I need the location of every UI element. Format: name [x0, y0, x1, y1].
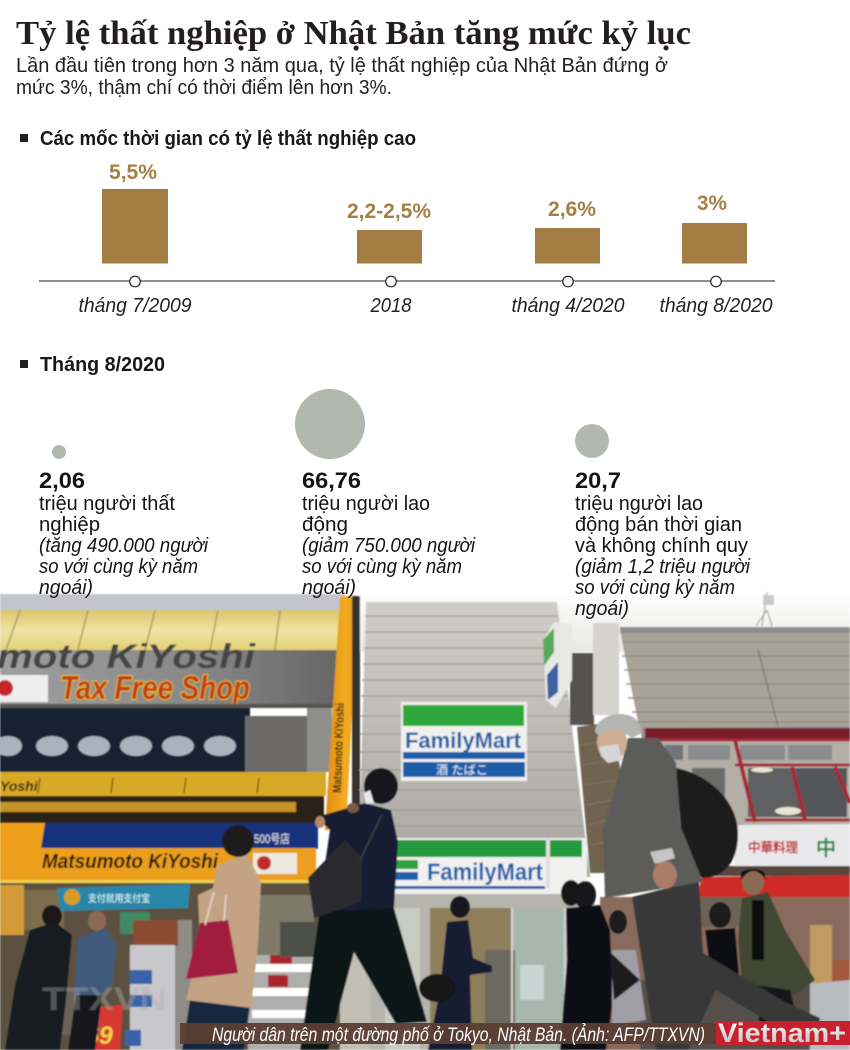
center building: grey siding — [358, 602, 590, 877]
left building: Matsumoto KiYoshi store front: Yoshi — [0, 778, 39, 794]
dark gap and light column between buildings — [570, 623, 624, 873]
stat column: unemployed: nghiệp — [39, 514, 100, 536]
FamilyMart store entrance — [370, 894, 595, 1050]
timeline axis — [39, 276, 775, 317]
timeline axis: tháng 8/2020 — [660, 294, 773, 317]
stat column: unemployed: (tăng 490.000 người — [39, 535, 209, 557]
stat column: labour force: ngoái) — [302, 577, 356, 599]
bar chart: unemployment milestones — [102, 161, 747, 264]
FamilyMart lower sign — [390, 838, 587, 894]
bar: 8/2020 — [682, 192, 747, 264]
intro text: mức 3%, thậm chí có thời điểm lên hơn 3%. — [16, 76, 392, 99]
restaurant sign — [690, 824, 850, 876]
orange pillar with vertical sign — [325, 596, 360, 836]
title: Tỷ lệ thất nghiệp ở Nhật Bản tăng mức kỷ lục — [16, 15, 691, 52]
left building: Matsumoto KiYoshi store front: moto KiYoshi — [0, 638, 257, 676]
heading: August 2020: Tháng 8/2020 — [40, 354, 165, 376]
stat column: part-time workers — [575, 424, 751, 620]
FamilyMart upper sign — [401, 702, 527, 781]
stat column: labour force: so với cùng kỳ năm — [302, 556, 462, 578]
stat column: part-time workers: và không chính quy — [575, 535, 748, 557]
stat column: unemployed: 2,06 — [39, 468, 85, 493]
photo: Tokyo street scene — [0, 592, 850, 1050]
stat column: part-time workers: so với cùng kỳ năm — [575, 577, 735, 599]
FamilyMart upper sign: FamilyMart — [405, 728, 522, 753]
man in dark suit with shoulder bag — [300, 768, 427, 1050]
stat column: labour force: (giảm 750.000 người — [302, 535, 476, 557]
timeline axis: tháng 4/2020 — [512, 294, 625, 317]
woman and man in green coat at right — [705, 869, 815, 1030]
timeline axis: tháng 7/2009 — [78, 294, 192, 317]
small man in FamilyMart doorway — [419, 896, 492, 1050]
photo sky — [358, 592, 850, 652]
intro text: Lần đầu tiên trong hơn 3 năm qua, tỷ lệ thất nghiệp của Nhật Bản đứng ở — [16, 54, 668, 77]
left building: Matsumoto KiYoshi store front: Matsumoto KiYoshi — [42, 851, 218, 873]
timeline axis: 2018 — [370, 294, 412, 317]
stat column: part-time workers: động bán thời gian — [575, 514, 742, 536]
bar: 7/2009 — [102, 161, 168, 264]
left building: Matsumoto KiYoshi store front: 支付就用支付宝 — [88, 892, 150, 905]
stat column: labour force: động — [302, 514, 348, 536]
bar: 4/2020: 2,6% — [548, 198, 596, 221]
restaurant sign: 中 — [816, 836, 836, 860]
side sign — [543, 622, 572, 708]
stat column: labour force: triệu người lao — [302, 493, 430, 515]
red awning — [697, 875, 850, 897]
caption bar: Người dân trên một đường phố ở Tokyo, Nhật Bản. (Ảnh: AFP/TTXVN) — [212, 1022, 705, 1046]
older man in grey suit with mask and backpack — [595, 714, 820, 1050]
stat column: unemployed — [39, 445, 209, 599]
restaurant sign: 中華料理 — [748, 840, 798, 855]
stat column: unemployed: so với cùng kỳ năm — [39, 556, 198, 578]
stat column: part-time workers: ngoái) — [575, 598, 629, 620]
bar: 7/2009: 5,5% — [109, 161, 157, 184]
stat column: labour force: 66,76 — [302, 468, 361, 493]
stat column: part-time workers: (giảm 1,2 triệu người — [575, 556, 751, 578]
left building: Matsumoto KiYoshi store front: Tax Free Shop — [60, 669, 250, 706]
left building: Matsumoto KiYoshi store front — [0, 594, 370, 1050]
people in background left — [5, 905, 117, 1050]
bar: 2018 — [347, 200, 431, 264]
woman in beige coat with red bag — [182, 825, 261, 1050]
stat column: labour force — [295, 389, 476, 599]
red window frame — [640, 726, 850, 830]
FamilyMart upper sign: 酒 たばこ — [436, 763, 488, 777]
left building: Matsumoto KiYoshi store front: 500号店 — [254, 832, 290, 846]
intro text — [16, 54, 668, 99]
left building: Matsumoto KiYoshi store front: 69 — [85, 1022, 113, 1050]
orange pillar with vertical sign: Matsumoto KiYoshi — [330, 703, 347, 793]
bar: 2018: 2,2-2,5% — [347, 200, 431, 223]
stat column: part-time workers: 20,7 — [575, 468, 621, 493]
TTXVN watermark: TTXVN — [42, 981, 167, 1017]
stat column: unemployed: ngoái) — [39, 577, 93, 599]
heading: timeline: Các mốc thời gian có tỷ lệ thất nghiệp cao — [40, 128, 416, 150]
group of pedestrians at centre — [560, 880, 646, 1050]
right building: roof and upper wall — [620, 592, 850, 732]
right shop interior — [600, 897, 850, 1050]
bar: 4/2020 — [535, 198, 600, 264]
bar: 8/2020: 3% — [697, 192, 727, 215]
stat column: unemployed: triệu người thất — [39, 493, 175, 515]
stat column: part-time workers: triệu người lao — [575, 493, 703, 515]
FamilyMart lower sign: FamilyMart — [427, 859, 543, 886]
logo: Vietnam+: Vietnam+ — [718, 1018, 846, 1048]
